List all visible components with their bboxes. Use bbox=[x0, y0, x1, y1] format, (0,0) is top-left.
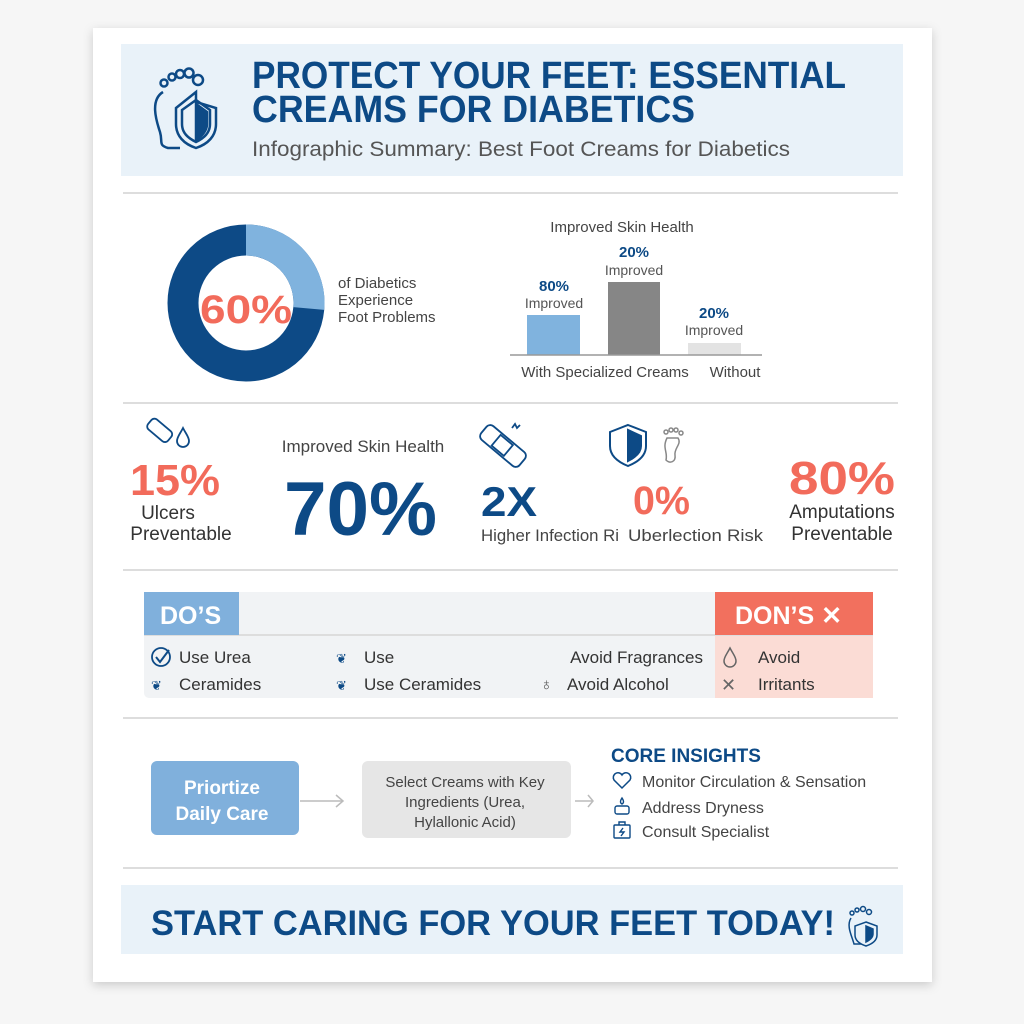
stat: 0%: Uberlection Risk bbox=[628, 526, 764, 545]
footer banner: START CARING FOR YOUR FEET TODAY! bbox=[151, 904, 835, 943]
do items bbox=[151, 648, 815, 695]
do items: ♁ bbox=[540, 675, 553, 694]
do items: ❦ bbox=[336, 678, 347, 693]
core insights: Monitor Circulation & Sensation bbox=[642, 774, 866, 791]
core insights bbox=[611, 746, 866, 841]
donut chart: 60% bbox=[200, 288, 292, 332]
bar chart bbox=[510, 219, 762, 381]
stat: 0% bbox=[610, 425, 764, 545]
flow step 2: Select Creams with Key bbox=[385, 774, 545, 791]
core insights: Consult Specialist bbox=[642, 824, 770, 841]
stat: amputations: Amputations bbox=[789, 502, 895, 523]
do items: Use Urea bbox=[179, 648, 251, 667]
bar chart: With Specialized Creams bbox=[521, 364, 689, 381]
don'ts header: DON’S ✕ bbox=[735, 602, 842, 630]
flow step 2: Hylallonic Acid) bbox=[414, 814, 516, 831]
card background bbox=[93, 28, 932, 982]
bar chart: Without bbox=[710, 364, 761, 381]
bar chart: 20% bbox=[619, 244, 649, 261]
flow step 1: Priortize bbox=[184, 778, 260, 799]
donut label: of Diabetics bbox=[338, 275, 416, 292]
stat: ulcers: 15% bbox=[130, 456, 220, 505]
footer banner bbox=[121, 885, 903, 954]
flow step 1: Daily Care bbox=[176, 804, 268, 825]
arrow bbox=[300, 795, 343, 807]
do items: ❦ bbox=[151, 678, 162, 693]
stat: 70%: 70% bbox=[284, 467, 437, 552]
do items: Avoid bbox=[758, 648, 800, 667]
stat: 2X: 2X bbox=[481, 478, 537, 525]
subtitle: Infographic Summary: Best Foot Creams for Diabetics bbox=[252, 138, 790, 161]
panel: do's and don'ts bbox=[144, 592, 873, 698]
do items: ❦ bbox=[336, 651, 347, 666]
stat: amputations bbox=[789, 452, 895, 545]
donut label: Foot Problems bbox=[338, 309, 436, 326]
stat: 0%: 0% bbox=[633, 479, 690, 523]
don'ts header bbox=[715, 592, 873, 635]
stat: ulcers: Preventable bbox=[130, 524, 232, 545]
do items: Ceramides bbox=[179, 675, 261, 694]
stat: ulcers: Ulcers bbox=[141, 503, 195, 524]
stat: 2X bbox=[478, 423, 619, 545]
bar chart: Improved bbox=[605, 262, 663, 278]
stat: amputations: 80% bbox=[789, 452, 895, 504]
do's header: DO’S bbox=[160, 602, 221, 630]
header band bbox=[121, 44, 903, 176]
do items: Use bbox=[364, 648, 394, 667]
bar chart: Improved bbox=[525, 295, 583, 311]
stat: amputations: Preventable bbox=[791, 524, 893, 545]
do's header bbox=[144, 592, 239, 635]
donut chart bbox=[183, 240, 309, 366]
donut label: Experience bbox=[338, 292, 413, 309]
stat: 70%: Improved Skin Health bbox=[282, 437, 444, 456]
donut label bbox=[338, 275, 436, 326]
header band: CREAMS FOR DIABETICS bbox=[252, 89, 695, 131]
arrow bbox=[575, 795, 593, 807]
flow step 2 bbox=[362, 761, 571, 838]
do items: ✕ bbox=[721, 675, 736, 695]
flow step 1 bbox=[151, 761, 299, 835]
do items: Avoid Alcohol bbox=[567, 675, 669, 694]
icon: foot with shield bbox=[155, 68, 216, 148]
stat: 70% bbox=[282, 437, 444, 552]
core insights: Address Dryness bbox=[642, 800, 764, 817]
flow step 2: Ingredients (Urea, bbox=[405, 794, 525, 811]
bar chart: Improved Skin Health bbox=[550, 219, 694, 236]
core insights: CORE INSIGHTS bbox=[611, 746, 761, 767]
do items: Avoid Fragrances bbox=[570, 648, 703, 667]
stat: 2X: Higher Infection Ri bbox=[481, 526, 619, 545]
do items: Use Ceramides bbox=[364, 675, 481, 694]
stat: ulcers bbox=[130, 417, 232, 545]
do items: Irritants bbox=[758, 675, 815, 694]
bar chart: 20% bbox=[699, 305, 729, 322]
bar chart: Improved bbox=[685, 322, 743, 338]
bar chart: 80% bbox=[539, 278, 569, 295]
title: PROTECT YOUR FEET: ESSENTIAL bbox=[252, 55, 846, 97]
